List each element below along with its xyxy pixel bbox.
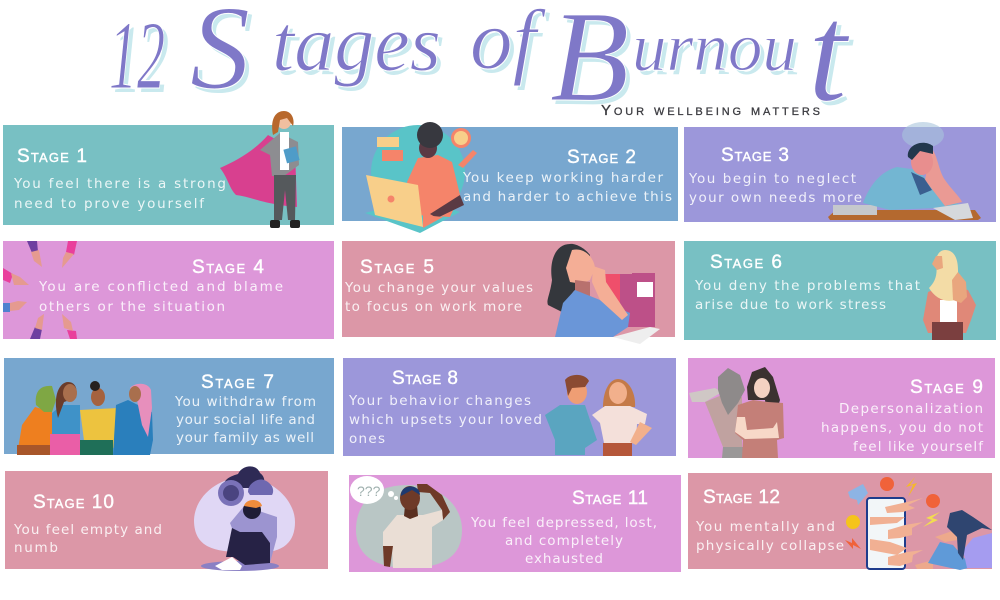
panel: stage 9 xyxy=(688,358,995,458)
body text: Your behavior changes xyxy=(348,393,531,409)
panel: stage 8 xyxy=(343,358,676,456)
panel: stage 10 xyxy=(5,466,328,571)
heading: Stage 12 xyxy=(703,487,780,508)
body text xyxy=(695,519,844,554)
body text: your social life and xyxy=(176,412,315,428)
illustration: exhausted man at desk xyxy=(828,122,981,220)
title: 12 xyxy=(113,6,169,114)
heading: Stage 2 xyxy=(567,147,636,168)
body text: need to prove yourself xyxy=(14,196,205,212)
panel: stage 6 xyxy=(684,241,996,340)
body text xyxy=(462,170,672,205)
body text: Depersonalization xyxy=(839,401,983,417)
body text: exhausted xyxy=(525,551,603,567)
body text: You are conflicted and blame xyxy=(38,279,283,295)
body text xyxy=(821,401,984,455)
heading: Stage 8 xyxy=(392,368,458,389)
illustration: person with head in hands xyxy=(194,466,295,571)
illustration: woman and grey double xyxy=(689,367,784,458)
body text xyxy=(694,278,920,313)
body text: numb xyxy=(14,540,58,556)
body text: physically collapse xyxy=(696,538,844,554)
illustration: group of four women xyxy=(17,381,153,455)
panel: stage 2 xyxy=(342,122,678,233)
illustration: confused man: ??? xyxy=(357,483,381,499)
illustration: woman in hijab with raised hand xyxy=(923,250,976,340)
body text: You change your values xyxy=(344,280,533,296)
panel: stage 12 xyxy=(688,473,992,570)
body text xyxy=(174,394,316,446)
heading: Stage 7 xyxy=(201,372,274,393)
body text: You withdraw from xyxy=(174,394,316,410)
illustration: thinking woman and folders xyxy=(547,244,660,344)
body text: your family as well xyxy=(176,430,314,446)
heading: Stage 10 xyxy=(33,492,114,513)
panel: stage 1 xyxy=(3,111,334,228)
body text: to focus on work more xyxy=(345,299,522,315)
title: tages xyxy=(276,4,445,92)
panel: stage 7 xyxy=(4,358,334,455)
illustration: phone with pointing hands xyxy=(845,477,992,570)
heading: Stage 6 xyxy=(710,252,782,273)
panel: stage 5 xyxy=(342,241,675,344)
illustration: person at laptop xyxy=(365,122,477,233)
body text xyxy=(688,171,862,206)
heading: Stage 11 xyxy=(572,488,648,509)
body text xyxy=(470,515,657,567)
body text xyxy=(13,522,162,556)
body text: your own needs more xyxy=(689,190,862,206)
body text: You deny the problems that xyxy=(694,278,920,294)
body text: arise due to work stress xyxy=(695,297,886,313)
body text: You feel empty and xyxy=(13,522,162,538)
heading: Stage 9 xyxy=(910,377,983,398)
panel: stage 11 xyxy=(349,475,681,572)
body text: You feel there is a strong xyxy=(13,176,226,192)
illustration: arguing couple xyxy=(545,375,652,456)
subtitle: Your wellbeing matters xyxy=(601,102,820,119)
body text: You mentally and xyxy=(695,519,835,535)
body text xyxy=(344,280,533,315)
title: urnou xyxy=(636,13,801,89)
heading: Stage 3 xyxy=(721,145,789,166)
body text: feel like yourself xyxy=(853,439,984,455)
body text: You begin to neglect xyxy=(688,171,856,187)
body text: which upsets your loved xyxy=(349,412,542,428)
title: 12 xyxy=(109,2,165,110)
illustration: confused man xyxy=(350,476,462,568)
body text xyxy=(348,393,542,447)
heading: Stage 4 xyxy=(192,257,264,278)
title: tages xyxy=(272,0,441,88)
panel: stage 4 xyxy=(3,241,334,339)
body text: ones xyxy=(349,431,385,447)
body text: You keep working harder xyxy=(462,170,663,186)
illustration: pointing hands xyxy=(3,241,77,339)
heading: Stage 5 xyxy=(360,257,434,278)
title xyxy=(109,0,854,135)
body text xyxy=(38,279,283,315)
body text: others or the situation xyxy=(39,299,225,315)
illustration: superhero woman xyxy=(220,111,300,228)
body text: happens, you do not xyxy=(821,420,983,436)
panel: stage 3 xyxy=(684,122,996,222)
title: urnou xyxy=(632,9,797,85)
body text: and completely xyxy=(505,533,623,549)
body text: and harder to achieve this xyxy=(463,189,672,205)
body text xyxy=(13,176,226,212)
body text: You feel depressed, lost, xyxy=(470,515,657,531)
heading: Stage 1 xyxy=(17,146,87,167)
